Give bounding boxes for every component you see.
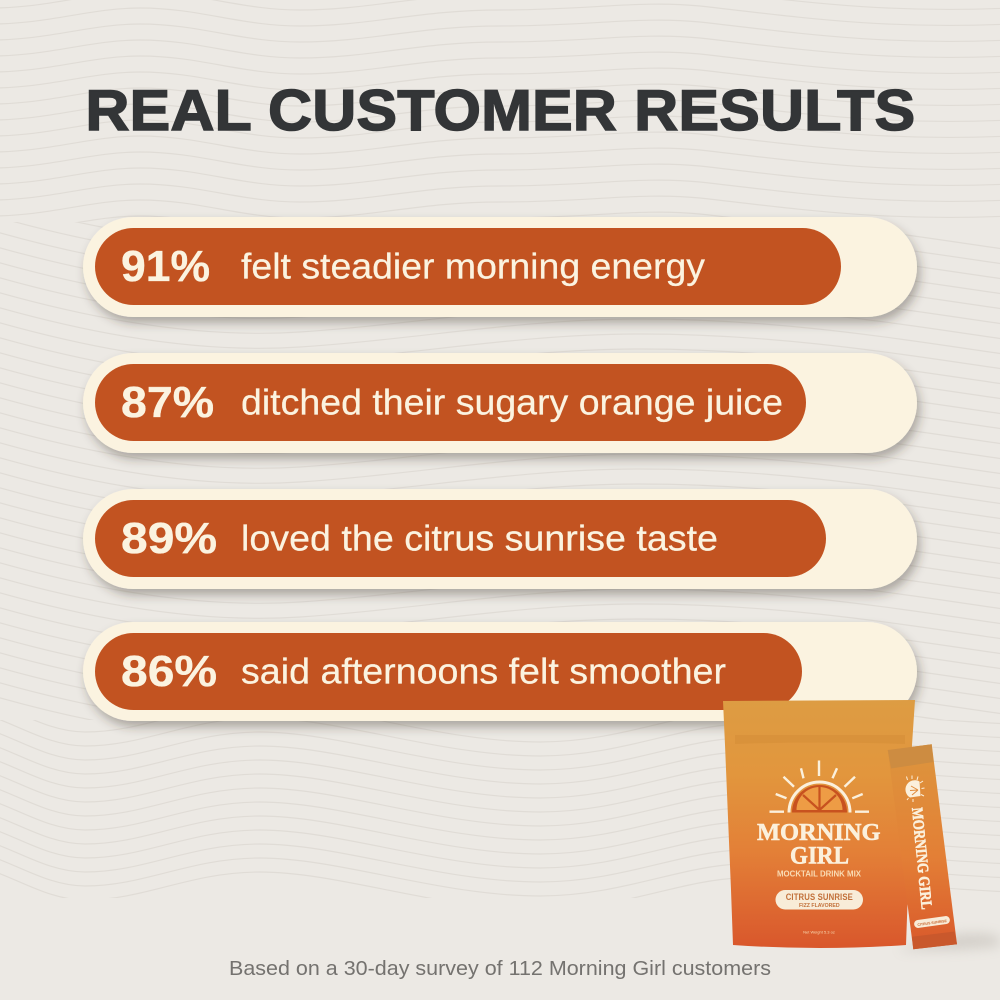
stat bar: 87%: [83, 353, 917, 453]
stat bar: 86%: said afternoons felt smoother: [241, 650, 726, 692]
pouch brand: MORNING: [757, 819, 881, 846]
stat bar: 86%: [83, 622, 917, 721]
pouch: GIRL: [790, 843, 849, 870]
stat bar: 87%: ditched their sugary orange juice: [241, 382, 783, 422]
pouch: Net Weight 5.3 oz: [803, 930, 835, 934]
flavor pill: [776, 890, 863, 910]
stat bar: 87%: 87%: [121, 377, 214, 427]
pouch: MOCKTAIL DRINK MIX: [777, 870, 862, 879]
product shadow: [900, 934, 1000, 950]
icon: sun logo: [770, 760, 869, 812]
stat bar: 91%: [83, 217, 917, 317]
stat bar: 89%: loved the citrus sunrise taste: [241, 518, 718, 558]
title: REAL CUSTOMER RESULTS: [86, 77, 915, 143]
stat bar: 91%: felt steadier morning energy: [241, 246, 705, 286]
footnote: Based on a 30-day survey of 112 Morning Girl customers: [229, 957, 771, 980]
product: pouch and stick pack: [723, 700, 1000, 950]
stick pack: CITRUS SUNRISE: [917, 919, 948, 927]
stat bar: 91%: 91%: [121, 242, 210, 291]
stick sun logo: [905, 776, 924, 802]
flavor pill: FIZZ FLAVORED: [799, 903, 840, 909]
flavor pill: CITRUS SUNRISE: [786, 891, 853, 902]
stat bar: 86%: 86%: [121, 646, 217, 696]
pouch: [723, 700, 915, 948]
stick pack: MORNING GIRL: [908, 807, 935, 910]
stat bar: 89%: [83, 489, 917, 589]
stat bar: 89%: 89%: [121, 513, 217, 563]
stick pack: [888, 744, 957, 949]
